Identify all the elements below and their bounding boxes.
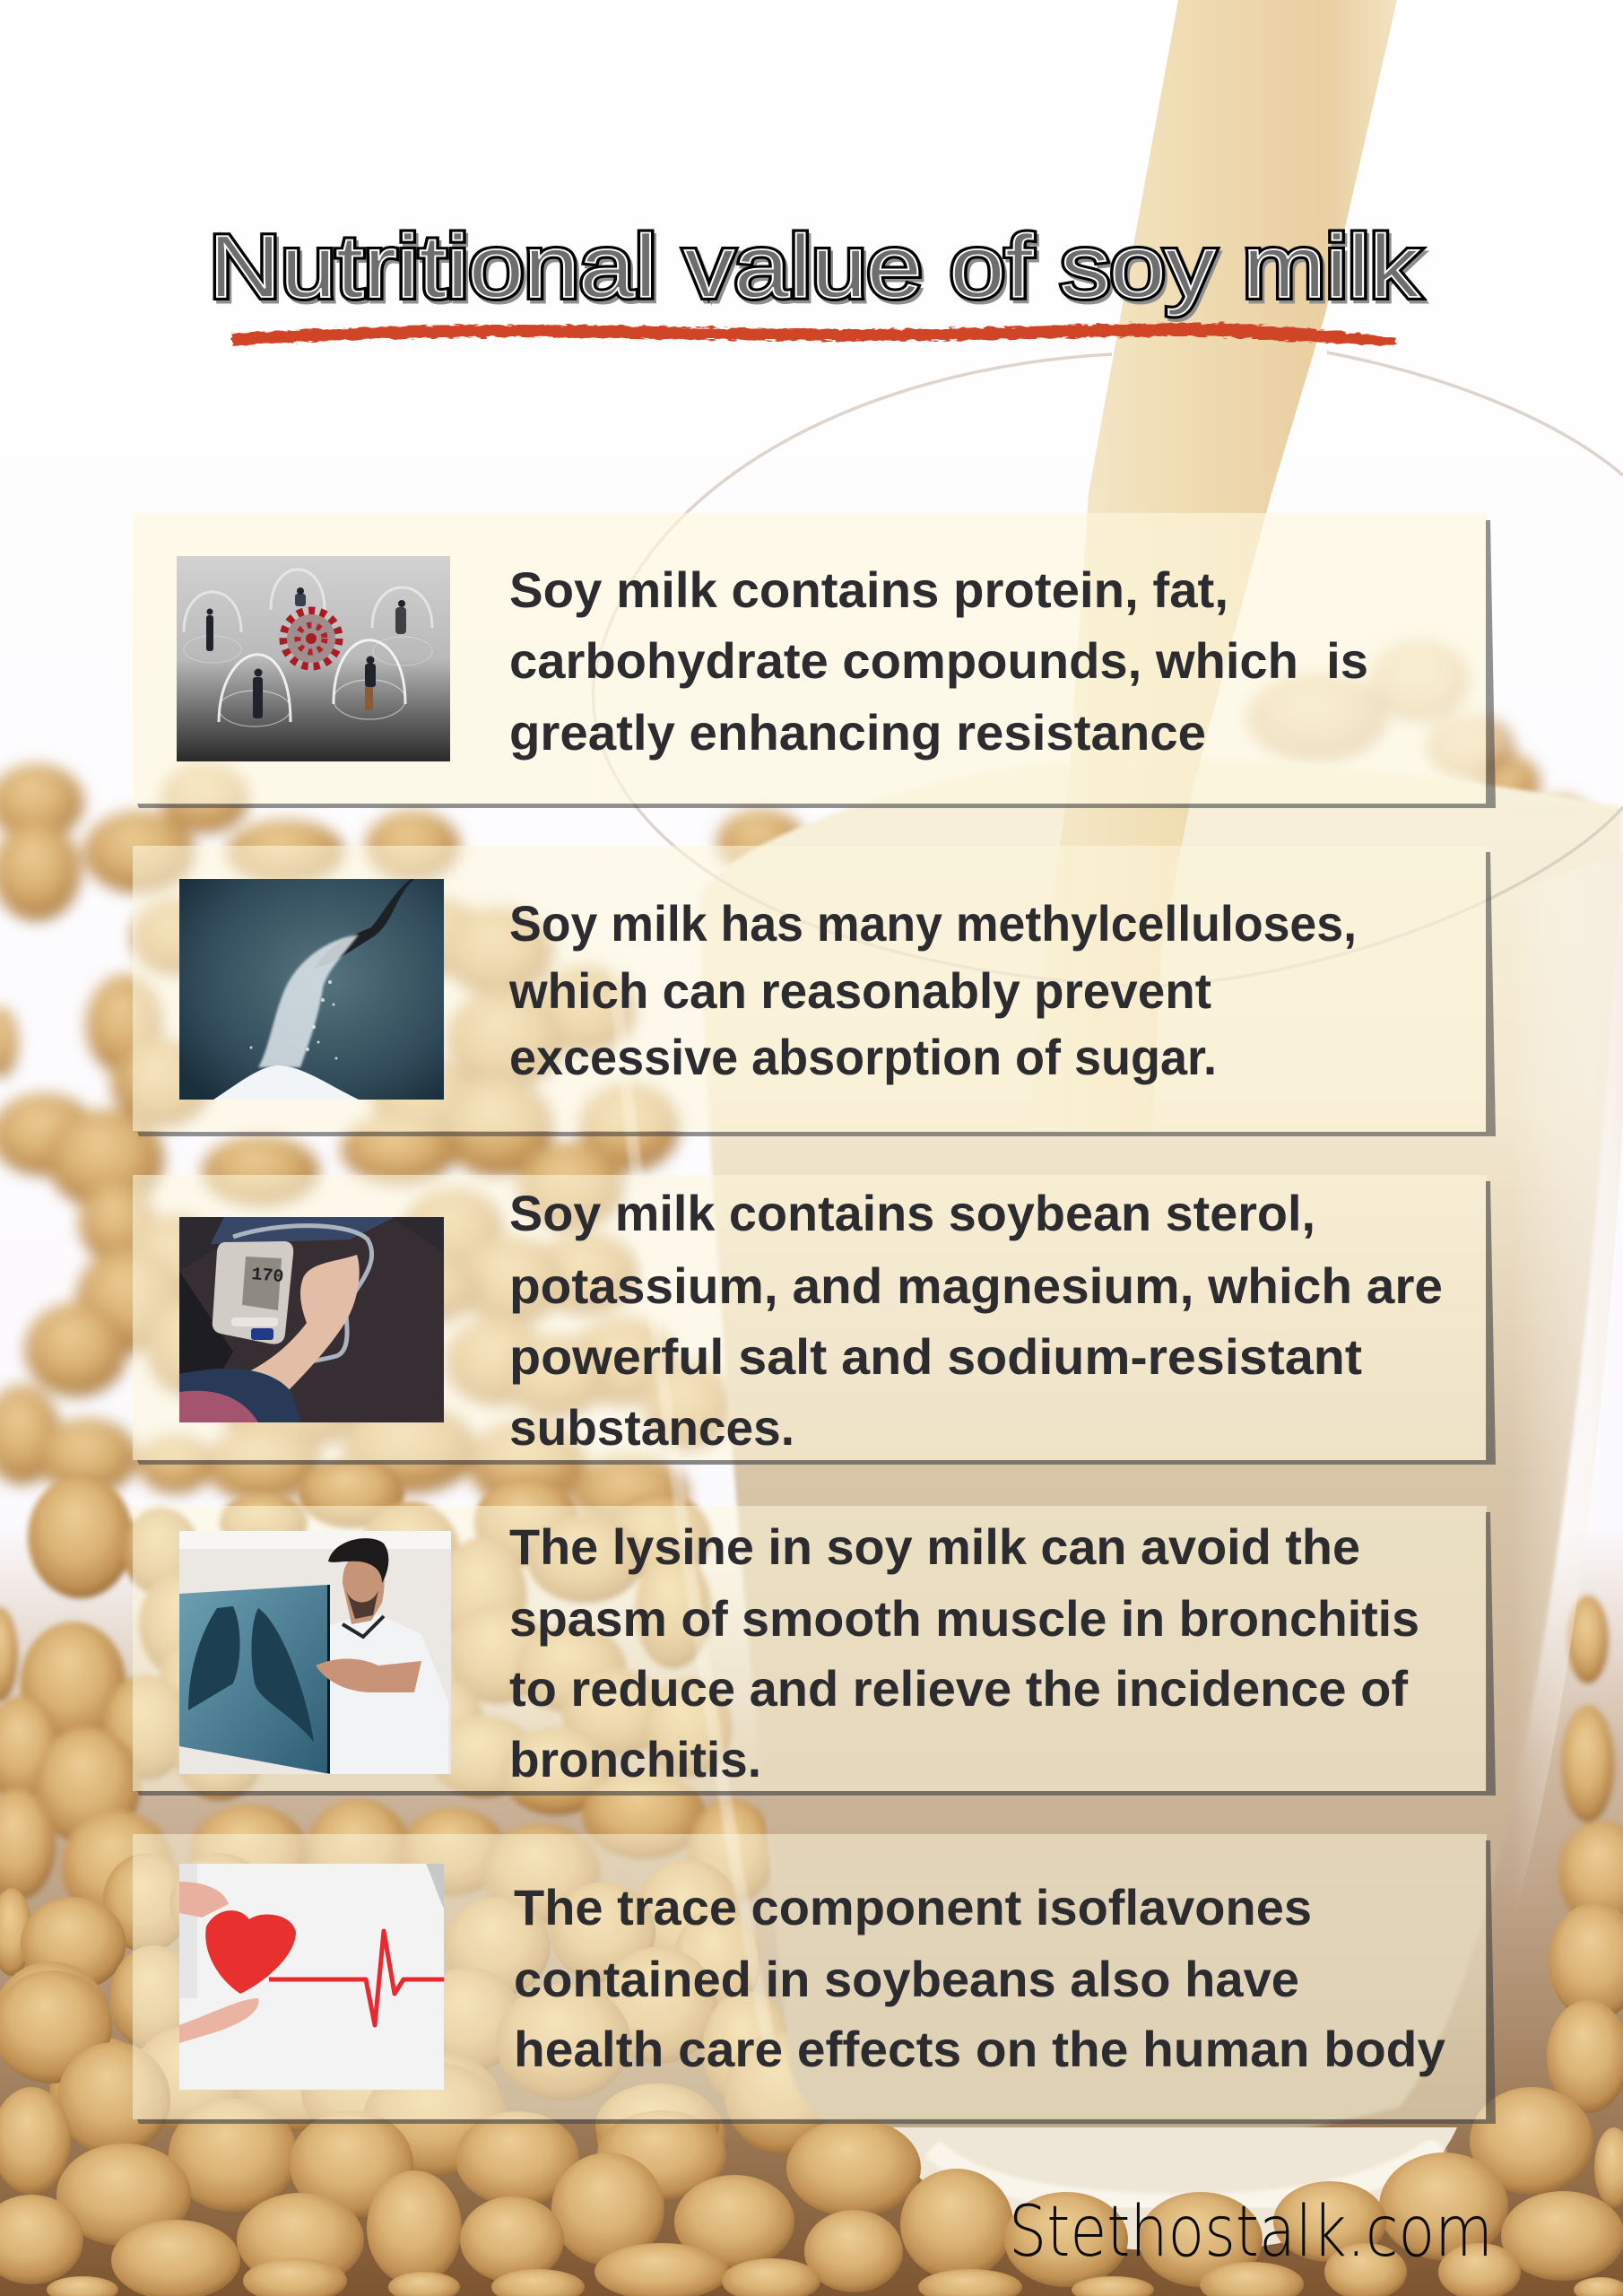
panel 3: salt and sodium (133, 1175, 1496, 1465)
title: Nutritional value of soy milk: Nutritional value of soy milk (212, 221, 1423, 319)
image: virus and people under glass domes (177, 556, 450, 761)
text: panel 3: Soy milk contains soybean sterol, (509, 1185, 1315, 1241)
foreground soybeans along the bottom (0, 1970, 1623, 2296)
image: doctor examining a lung x-ray (179, 1531, 451, 1774)
background: soybeans, middle field (0, 1457, 1623, 1926)
title: Nutritional value of soy milk: Nutritional value of soy milk (209, 217, 1420, 316)
text: panel 2: which can reasonably prevent (508, 962, 1211, 1019)
panel 2: sugar absorption (133, 846, 1496, 1136)
text: panel 5: health care effects on the human body (514, 2021, 1445, 2077)
panel 5: isoflavones (133, 1834, 1496, 2124)
milk: pouring stream (1031, 0, 1397, 1130)
text: panel 4 (509, 1518, 1419, 1787)
background: blurred soybeans, upper field (0, 639, 1593, 1531)
virus (283, 611, 339, 666)
hand and arm (249, 1255, 360, 1396)
title: Nutritional value of soy milk: Nutritional value of soy milk (209, 217, 1420, 316)
footer: website credit: Stethostalk.com (1009, 2192, 1493, 2273)
glass: rim (593, 352, 1623, 987)
glass: milk body (699, 759, 1623, 2170)
heart (205, 1910, 296, 1994)
doctor (316, 1538, 448, 1774)
image: blood pressure monitor on an arm (179, 1217, 444, 1422)
text: panel 5: contained in soybeans also have (514, 1951, 1299, 2007)
text: panel 3 (509, 1185, 1443, 1456)
monitor: 170 (250, 1265, 284, 1288)
panel 1: resistance (133, 513, 1496, 808)
background: shadowed ground under the soybeans (0, 1525, 1623, 2296)
glass: bright base crescent (933, 2144, 1439, 2205)
text: panel 2: Soy milk has many methylcelluloses, (509, 895, 1357, 952)
monitor (213, 1241, 293, 1344)
title underline: red brush stroke (232, 323, 1395, 346)
panel 4: bronchitis (133, 1506, 1496, 1796)
text: panel 3: powerful salt and sodium-resistant (509, 1328, 1362, 1385)
text: panel 1: greatly enhancing resistance (509, 704, 1206, 761)
text: panel 3: substances. (509, 1399, 794, 1456)
text: panel 1 (509, 561, 1368, 761)
text: panel 2 (508, 895, 1357, 1085)
text: panel 4: to reduce and relieve the incidence of (509, 1660, 1408, 1717)
text: panel 1: carbohydrate compounds, which is (509, 632, 1368, 689)
glass: milky base under the panel (883, 2127, 1457, 2251)
text: panel 5: The trace component isoflavones (514, 1879, 1312, 1935)
glass: translucent lower-right wall (1255, 852, 1623, 2152)
text: panel 4: bronchitis. (509, 1731, 761, 1787)
image: sugar pouring from a spoon (179, 879, 444, 1100)
text: panel 2: excessive absorption of sugar. (509, 1029, 1217, 1085)
text: panel 3: potassium, and magnesium, which are (509, 1257, 1443, 1314)
background: soybeans, lower field (0, 1853, 1623, 2187)
image: red heart in hand with ECG line (179, 1864, 444, 2090)
text: panel 1: Soy milk contains protein, fat, (509, 561, 1228, 618)
text: panel 4: The lysine in soy milk can avoid the (509, 1518, 1360, 1575)
glass: left wall (594, 700, 771, 2054)
cuff (179, 1369, 301, 1422)
text: panel 4: spasm of smooth muscle in bronchitis (509, 1590, 1419, 1647)
text: panel 5 (514, 1879, 1445, 2077)
